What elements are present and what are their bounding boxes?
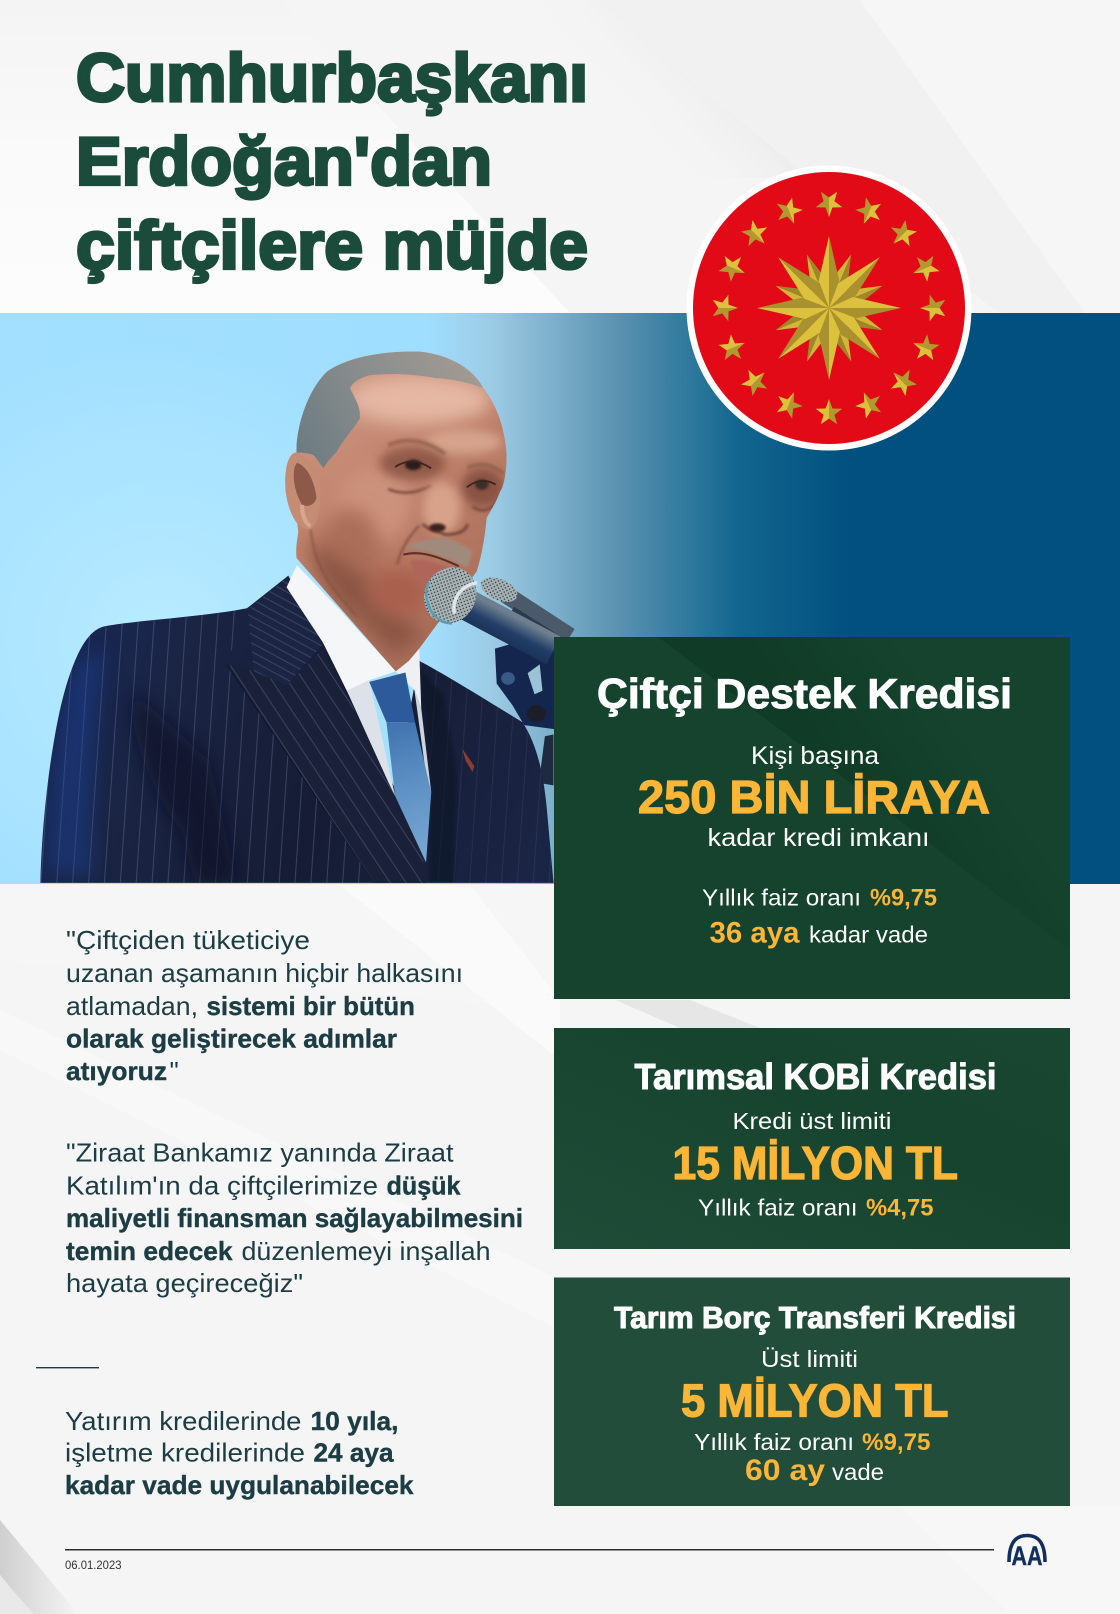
quote: first statement: sistemi bir bütün (206, 991, 415, 1021)
lapel pin (462, 749, 474, 772)
annual rate: Yıllık faiz oranı (694, 1429, 854, 1455)
annual rate (702, 884, 937, 912)
annual rate: %9,75 (870, 884, 937, 912)
title: Erdoğan'dan (76, 124, 492, 200)
annual rate (694, 1429, 930, 1456)
figure: 15 milyon TL: 15 MİLYON TL (672, 1137, 958, 1189)
suit jacket (40, 576, 553, 883)
eyes and brows (380, 441, 504, 510)
term: 36 aya (710, 916, 800, 950)
quote: second statement: hayata geçireceğiz" (66, 1268, 303, 1298)
quote: second statement: Katılım'ın da çiftçilerimize (66, 1170, 378, 1200)
shirt and collar (287, 565, 431, 796)
emblem: Presidential seal (686, 166, 972, 450)
tie (369, 672, 431, 863)
text: loan terms note: kadar vade uygulanabilecek (65, 1470, 414, 1500)
panel heading: Çiftçi Destek Kredisi (597, 670, 1012, 717)
quote: second statement (66, 1138, 523, 1298)
quote: second statement: "Ziraat Bankamız yanında Ziraat (66, 1138, 454, 1168)
icon: AA logo: AA (1012, 1541, 1042, 1571)
text: upper limit: Üst limiti (761, 1346, 858, 1372)
rear microphone (480, 578, 574, 637)
date: 06.01.2023 (65, 1560, 122, 1572)
annual rate: %4,75 (866, 1194, 934, 1222)
quote: first statement: olarak geliştirecek adımlar (66, 1024, 397, 1054)
text: loan terms note: Yatırım kredilerinde (65, 1406, 302, 1436)
term (710, 916, 928, 950)
photo: speaker at microphones (40, 347, 570, 883)
term: vade (832, 1459, 884, 1485)
quote: second statement: düşük (386, 1170, 461, 1200)
text: loan terms note: 24 aya (314, 1438, 394, 1468)
quote: first statement: uzanan aşamanın hiçbir halkasını (66, 958, 463, 988)
hero band (0, 313, 1120, 884)
text: per person: Kişi başına (751, 742, 879, 770)
title (76, 40, 588, 284)
term: kadar vade (809, 922, 928, 948)
moustache and mouth (397, 526, 473, 585)
title: Cumhurbaşkanı (76, 40, 588, 116)
facial shading (306, 375, 502, 656)
text: loan terms note: işletme kredilerinde (65, 1438, 305, 1468)
quote: second statement: düzenlemeyi inşallah (242, 1236, 490, 1266)
panel heading: Tarım Borç Transferi Kredisi (614, 1300, 1016, 1335)
quote: first statement: atıyoruz (66, 1056, 167, 1086)
panel: Çiftçi Destek Kredisi (554, 637, 1070, 999)
head (292, 347, 512, 677)
quote: second statement: maliyetli finansman sağlayabilmesini (66, 1203, 523, 1233)
panel: Tarım Borç Transferi Kredisi (554, 1278, 1070, 1506)
quote: second statement: temin edecek (66, 1236, 233, 1266)
central 16-pointed sun (757, 236, 901, 380)
lapels (270, 608, 322, 685)
ear (285, 452, 320, 529)
annual rate (698, 1194, 934, 1222)
ring of 16 stars (713, 192, 945, 424)
quote: first statement: atlamadan, (66, 991, 198, 1021)
term: 60 ay (745, 1454, 825, 1487)
annual rate: %9,75 (862, 1429, 930, 1456)
figure: 250 bin liraya: 250 BİN LİRAYA (638, 771, 990, 823)
panel: Tarımsal KOBİ Kredisi (554, 1028, 1070, 1249)
quote: first statement: "Çiftçiden tüketiciye (66, 925, 310, 955)
front microphone (414, 557, 553, 650)
annual rate: Yıllık faiz oranı (698, 1194, 858, 1220)
text: loan terms note (65, 1406, 414, 1500)
bracket (495, 642, 555, 785)
nose (423, 482, 467, 535)
icon: AA logo (1009, 1536, 1045, 1571)
figure: 5 milyon TL: 5 MİLYON TL (681, 1374, 948, 1426)
title: çiftçilere müjde (76, 208, 588, 284)
text: credit facility: kadar kredi imkanı (708, 824, 930, 852)
annual rate: Yıllık faiz oranı (702, 884, 861, 910)
quote: first statement (66, 925, 463, 1086)
text: loan terms note: 10 yıla, (310, 1406, 398, 1436)
microphones (414, 557, 570, 785)
text: credit limit: Kredi üst limiti (732, 1108, 892, 1134)
hair (295, 351, 483, 468)
term (745, 1454, 884, 1487)
panel heading: Tarımsal KOBİ Kredisi (634, 1056, 996, 1097)
quote: first statement: " (170, 1056, 179, 1086)
